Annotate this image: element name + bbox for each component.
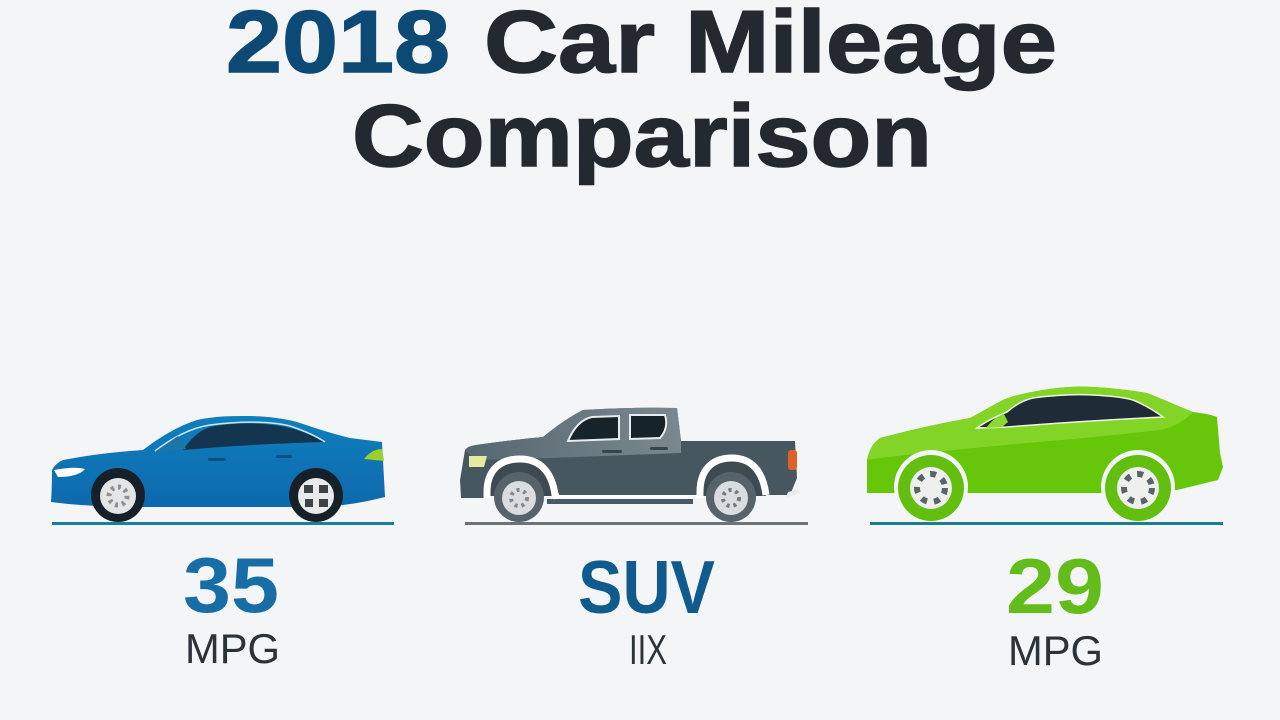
stat: 29 MPG (1006, 542, 1104, 674)
wheel: rear (1101, 450, 1175, 524)
stat: 35 MPG: 35 (183, 541, 279, 629)
wheel: rear (700, 458, 766, 522)
stat: SUV IIX (578, 545, 715, 673)
ground line: pickup truck (465, 522, 808, 525)
pickup truck (460, 408, 800, 522)
green car (867, 387, 1223, 524)
ground line: blue sedan (52, 522, 394, 525)
wheel: front (486, 459, 557, 522)
stat: SUV IIX: IIX (629, 626, 667, 673)
wheel: front (894, 450, 968, 524)
stat: SUV IIX: SUV (578, 545, 715, 629)
body (460, 408, 797, 498)
ground line: green car (870, 522, 1223, 525)
wheel: front (91, 468, 145, 522)
stat: 29 MPG: MPG (1008, 627, 1103, 674)
stat: 35 MPG: MPG (185, 625, 280, 672)
wheel: rear (289, 468, 343, 522)
body (51, 416, 385, 507)
blue sedan (51, 416, 385, 522)
body (867, 387, 1223, 493)
title (226, 0, 1057, 185)
sill highlight (555, 495, 700, 498)
stat: 29 MPG: 29 (1006, 542, 1104, 630)
title: Comparison (352, 86, 932, 185)
stat: 35 MPG (183, 541, 280, 672)
side step (484, 495, 790, 510)
